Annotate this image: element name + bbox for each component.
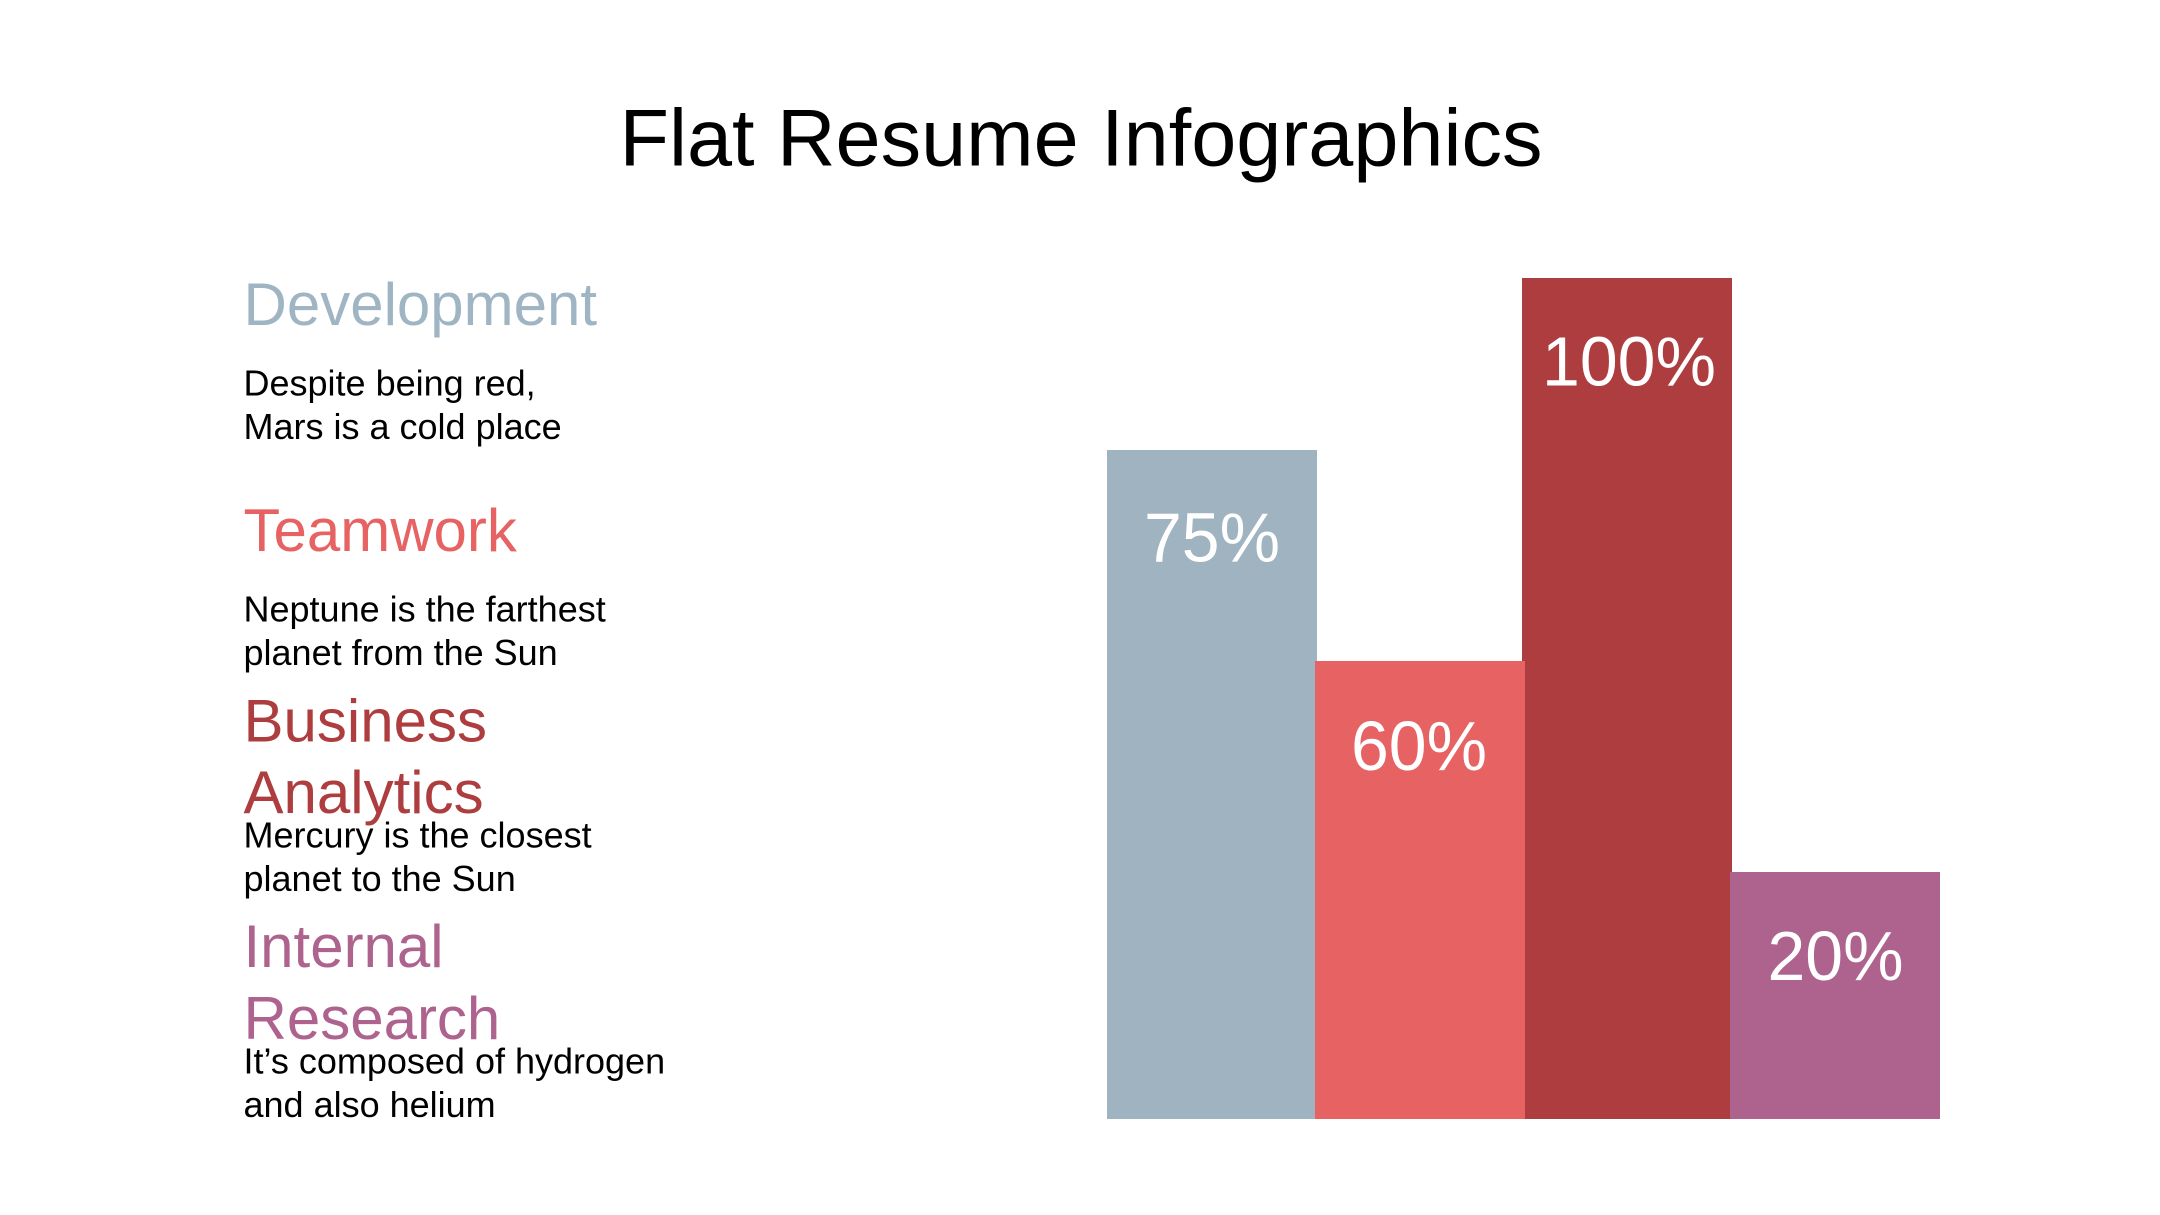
heading: business analytics: Business	[244, 688, 487, 754]
bar: 60%	[1315, 661, 1525, 1119]
description: development: Mars is a cold place	[244, 406, 562, 447]
heading: internal research: Internal	[244, 913, 444, 980]
skill: development	[244, 271, 597, 447]
description: business analytics: Mercury is the closest	[244, 814, 592, 856]
description: teamwork: planet from the Sun	[244, 632, 558, 673]
description: development: Despite being red,	[244, 362, 536, 404]
bar: 100%: 100%	[1542, 322, 1716, 400]
description: teamwork: Neptune is the farthest	[244, 588, 606, 630]
description: business analytics: planet to the Sun	[244, 858, 516, 899]
skill: internal research	[244, 913, 665, 1125]
title: Flat Resume Infographics	[620, 94, 1542, 184]
description: internal research: It’s composed of hydrogen	[244, 1040, 665, 1082]
skill: teamwork	[244, 497, 606, 673]
bar: 75%	[1107, 450, 1317, 1119]
heading: internal research: Research	[244, 985, 500, 1052]
bar: 75%: 75%	[1144, 498, 1280, 576]
bar: 20%	[1730, 872, 1940, 1119]
heading: teamwork: Teamwork	[244, 497, 518, 564]
description: internal research: and also helium	[244, 1084, 496, 1125]
heading: business analytics: Analytics	[244, 759, 484, 826]
skill: business analytics	[244, 688, 592, 899]
bar: 100%	[1522, 278, 1732, 1119]
heading: development: Development	[244, 271, 597, 338]
bar: 20%: 20%	[1768, 917, 1904, 995]
bar chart	[1107, 278, 1940, 1119]
bar: 60%: 60%	[1351, 707, 1487, 785]
